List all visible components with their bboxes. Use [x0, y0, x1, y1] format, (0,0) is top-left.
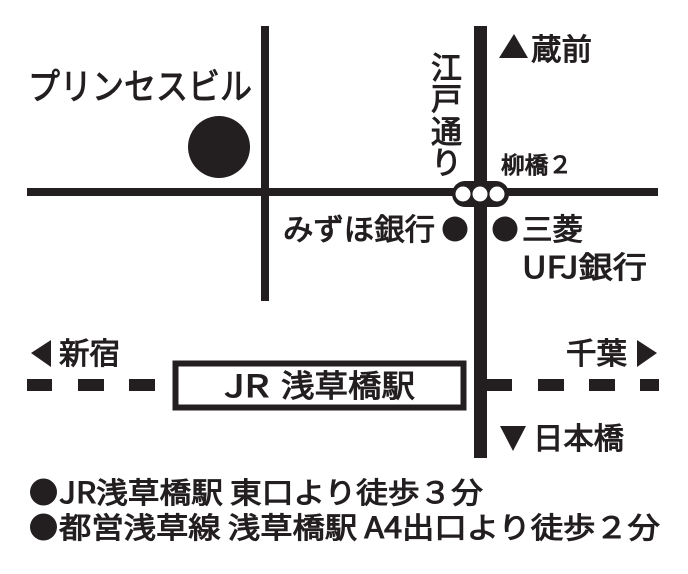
- station box: JR Asakusabashi: 浅草橋駅: [281, 361, 415, 406]
- icon: building location marker: [188, 116, 250, 178]
- railway: JR line dashes left: [27, 379, 155, 391]
- icon: traffic signal at Yanagibashi 2: [452, 181, 509, 207]
- icon: MUFG Bank marker: [492, 216, 518, 242]
- access note: Toei walk: 都営浅草線 浅草橋駅 A4出口より徒歩２分: [59, 505, 660, 547]
- icon: Mizuho Bank marker: [442, 216, 468, 242]
- railway: JR line dashes right: [487, 379, 659, 391]
- label: to Shinjuku: [31, 329, 120, 373]
- label: MUFG Bank: 三菱: [522, 205, 583, 249]
- label: Edo-dori vertical: り: [431, 138, 462, 183]
- label: Edo-dori vertical: 戸: [431, 74, 462, 119]
- station box: JR Asakusabashi: [176, 361, 464, 408]
- road: Edo-dori main vertical street: [474, 26, 487, 458]
- label: to Chiba: 千葉: [566, 329, 627, 373]
- road: left vertical street: [261, 26, 269, 301]
- label: Princess Building: プリンセスビル: [28, 58, 252, 110]
- label: Edo-dori vertical: 江: [431, 43, 462, 88]
- label: Edo-dori vertical: 通: [431, 107, 462, 152]
- access note: JR walk: JR浅草橋駅 東口より徒歩３分: [59, 470, 483, 512]
- label: to Chiba: [566, 329, 657, 373]
- label: to Shinjuku: 新宿: [59, 329, 120, 373]
- label: MUFG Bank: [522, 205, 647, 287]
- label: Mizuho Bank: みずほ銀行: [283, 205, 435, 249]
- road: horizontal street: [27, 188, 658, 196]
- label: Yanagibashi 2: 柳橋２: [501, 146, 572, 180]
- label: to Nihonbashi: 日本橋: [533, 414, 624, 458]
- label: to Kuramae: [499, 25, 592, 69]
- label: MUFG Bank: UFJ銀行: [522, 243, 647, 287]
- station box: JR Asakusabashi: JR: [224, 361, 269, 406]
- label: Edo-dori vertical: [431, 43, 462, 183]
- label: to Kuramae: 蔵前: [531, 25, 592, 69]
